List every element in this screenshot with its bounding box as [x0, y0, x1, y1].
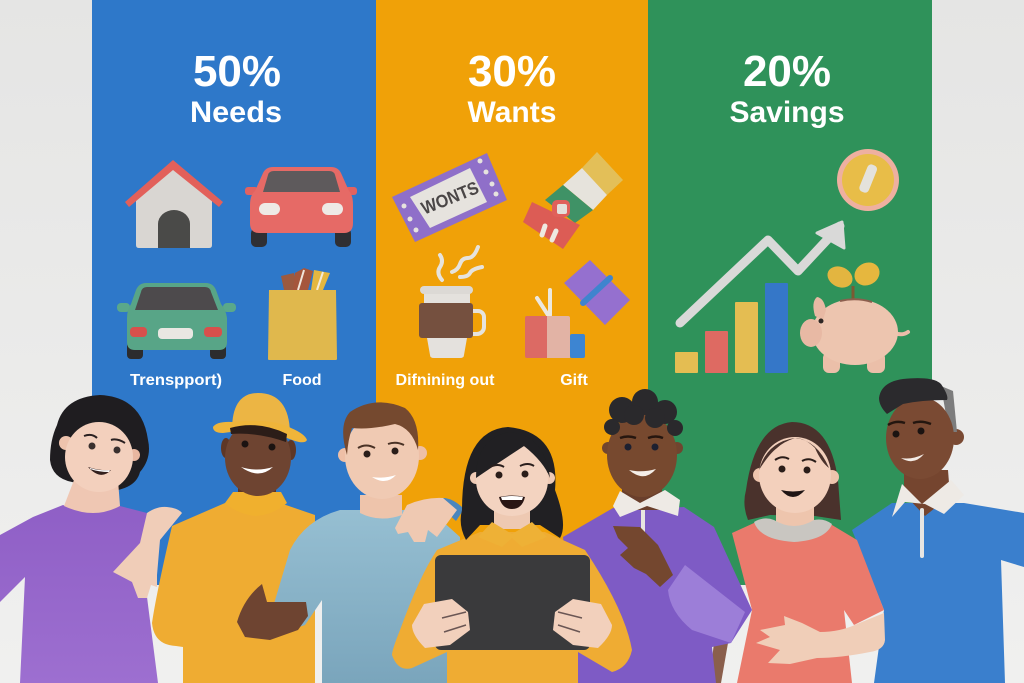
icon: food bag — [268, 268, 337, 360]
hand — [613, 526, 673, 587]
heading: 20% Savings: Savings — [729, 96, 845, 129]
heading: 20% Savings — [729, 47, 845, 129]
icon: ticket — [392, 153, 507, 242]
label: Food: Food — [282, 372, 322, 389]
polo collar — [613, 490, 680, 517]
person 5: purple polo — [563, 389, 752, 683]
person 2: yellow sweater and hat — [152, 393, 315, 683]
heading: 50% Needs: Needs — [190, 96, 282, 129]
icon: purple box — [564, 260, 630, 325]
people group — [0, 378, 1024, 683]
arm and hand — [113, 507, 182, 598]
icon: coin — [837, 149, 899, 211]
heading: 20% Savings: 20% — [743, 47, 831, 96]
label: Gift: Gift — [560, 372, 588, 389]
person 3: light blue sweater — [273, 402, 464, 683]
curly hair — [604, 389, 683, 436]
chart: growth bars — [675, 283, 788, 373]
icon: gift — [525, 290, 585, 358]
person 4: center with tablet — [392, 427, 632, 683]
icon: house — [125, 160, 223, 248]
arrow: upward trend — [680, 222, 844, 323]
tablet — [435, 555, 590, 650]
panel: wants — [376, 0, 648, 585]
shirt collar — [478, 522, 547, 547]
polo collar — [892, 480, 964, 517]
icon: green car — [117, 283, 236, 359]
person 6: coral shirt — [732, 422, 885, 683]
icon: ticket: WONTS — [418, 177, 482, 219]
hands — [412, 599, 612, 648]
heading: 30% Wants: Wants — [468, 96, 556, 129]
label: Transport: Trenspport) — [130, 372, 222, 389]
icon: coffee cup — [419, 247, 484, 358]
heading: 50% Needs — [190, 47, 282, 129]
person 7: blue polo — [852, 378, 1024, 683]
person 1: purple top — [0, 395, 182, 683]
person 2 hand — [237, 584, 308, 640]
icon: red car — [245, 167, 357, 247]
heading: 50% Needs: 50% — [193, 47, 281, 96]
panel: needs — [92, 0, 376, 585]
label: Dining out: Difnining out — [396, 372, 495, 389]
heading: 30% Wants: 30% — [468, 47, 556, 96]
icon: piggy bank — [800, 258, 908, 373]
icon: shopping items — [523, 152, 623, 249]
panel: savings — [648, 0, 932, 585]
heading: 30% Wants — [468, 47, 556, 129]
arm and hand — [756, 613, 885, 664]
cuff and hand on shoulder — [443, 498, 464, 521]
